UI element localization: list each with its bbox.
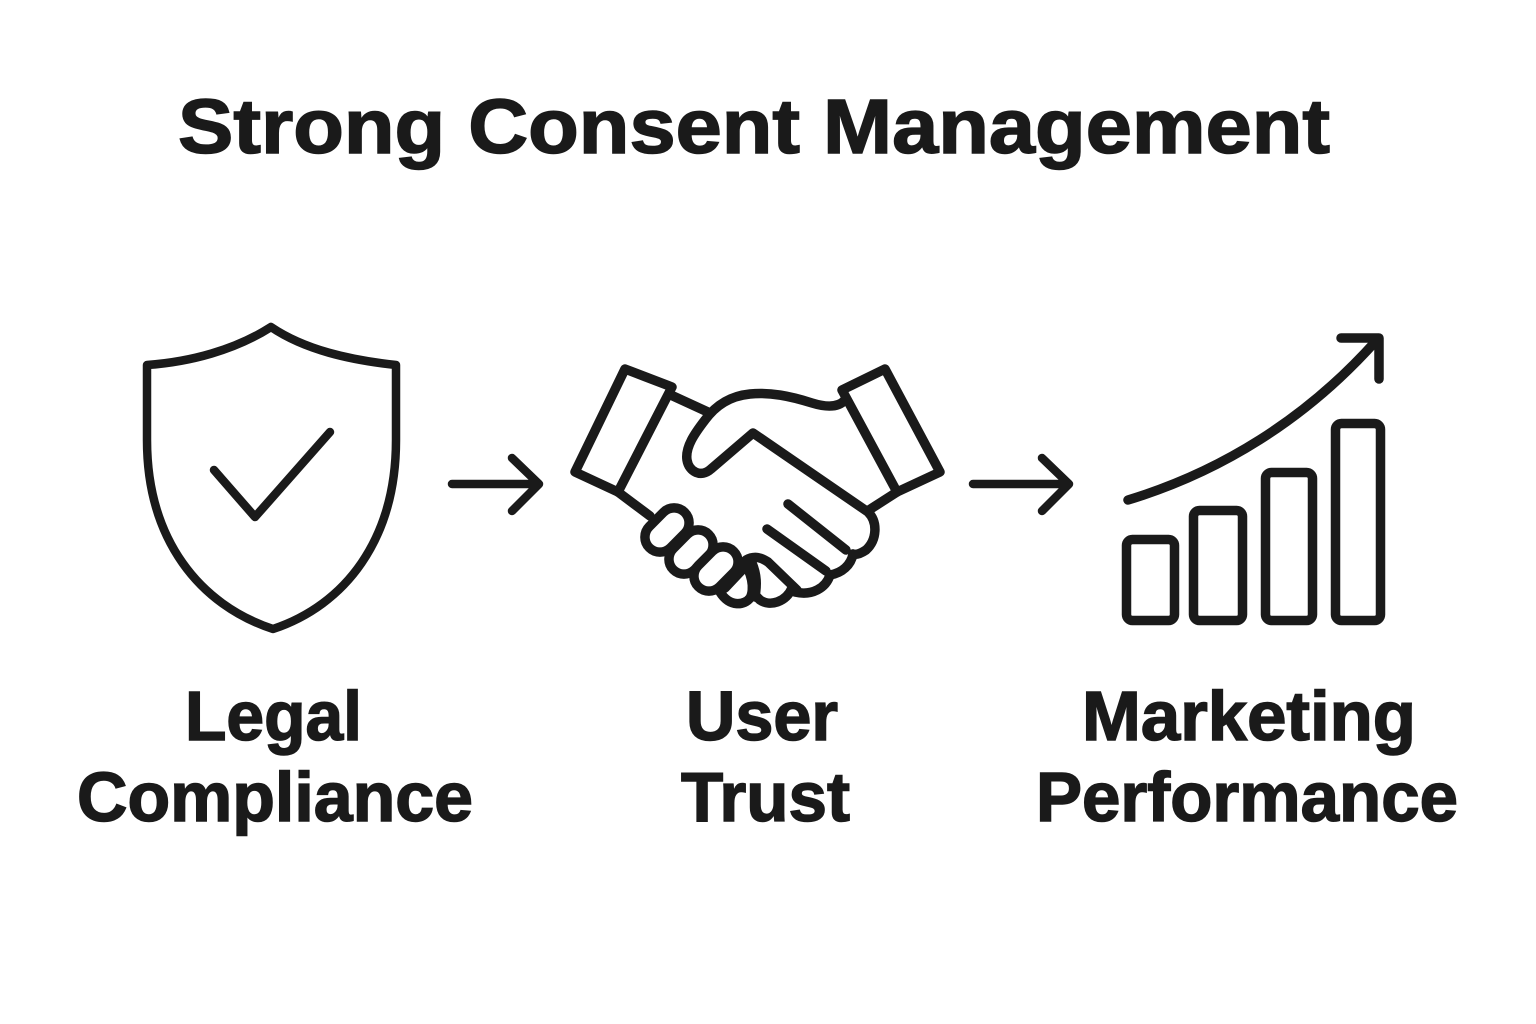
label: marketing performance: [1036, 677, 1458, 836]
label: user trust: [681, 677, 850, 836]
bar 3: [1266, 472, 1312, 620]
label: user trust: Trust: [681, 758, 850, 836]
label: marketing performance: Performance: [1036, 758, 1458, 836]
icon: rising bar chart with arrow: [1126, 338, 1380, 620]
bar 4: [1336, 424, 1380, 620]
label: legal compliance: Legal: [185, 677, 362, 755]
icon: handshake: [575, 369, 940, 604]
label: legal compliance: Compliance: [77, 758, 473, 836]
bar 1: [1126, 540, 1174, 620]
icon: shield with check mark: [147, 327, 396, 629]
bar 2: [1194, 510, 1242, 620]
title: Strong Consent Management: [178, 84, 1330, 170]
label: legal compliance: [77, 677, 473, 836]
label: user trust: User: [686, 677, 838, 755]
growth arrow: [1128, 338, 1379, 500]
arrow: compliance to trust: [452, 458, 539, 511]
arrow: trust to marketing: [973, 458, 1069, 511]
label: marketing performance: Marketing: [1082, 677, 1416, 755]
